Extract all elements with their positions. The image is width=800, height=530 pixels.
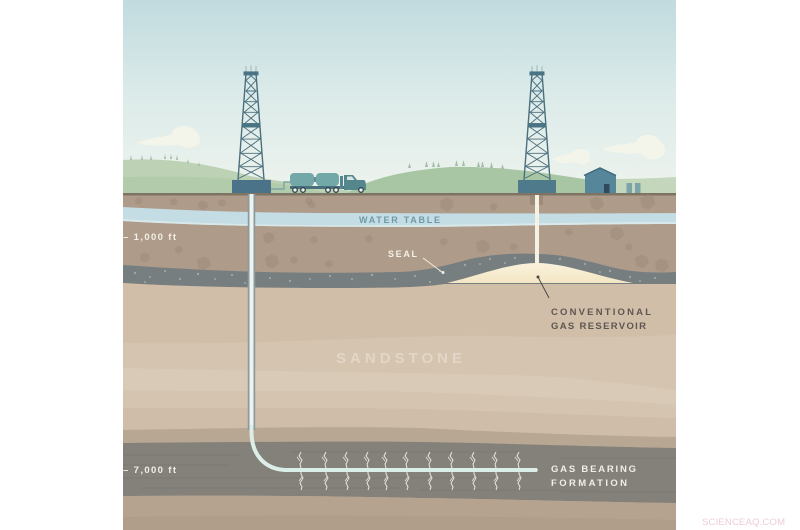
horizontal well	[252, 194, 537, 470]
ground line	[123, 193, 676, 196]
scene clipped to panel	[123, 65, 676, 530]
redraw well over fractures	[300, 468, 538, 472]
soil speckles	[135, 194, 669, 272]
upper soil layer	[123, 194, 676, 290]
deep rock layer	[146, 496, 668, 503]
seal label	[388, 249, 444, 274]
background panel	[123, 0, 676, 530]
gas bearing formation label: GAS BEARING	[551, 464, 636, 475]
depth label 1,000 ft: – 1,000 ft	[123, 232, 177, 243]
water table label: WATER TABLE	[359, 215, 440, 225]
conventional gas reservoir label: GAS RESERVOIR	[551, 321, 646, 332]
cloud: left	[136, 126, 200, 148]
derrick base	[232, 180, 271, 194]
hills	[123, 159, 676, 194]
sandstone strata	[123, 283, 676, 448]
clouds	[136, 126, 665, 164]
depth label 7,000 ft: – 7,000 ft	[123, 465, 177, 476]
gas reservoir	[447, 263, 633, 283]
derrick base right	[518, 180, 556, 194]
oil derrick left	[232, 65, 271, 194]
reservoir arrow	[536, 276, 549, 298]
seal label: SEAL	[388, 249, 418, 259]
conventional gas reservoir label: CONVENTIONAL	[551, 307, 651, 318]
shed	[584, 168, 616, 194]
gas bearing formation label: FORMATION	[551, 478, 627, 489]
oil derrick right	[518, 65, 556, 194]
cloud: middle	[552, 149, 590, 164]
sandstone label: SANDSTONE	[336, 350, 462, 367]
trees on hills	[130, 154, 504, 169]
fractures	[297, 452, 521, 490]
gas bearing formation	[123, 442, 676, 503]
seal arrow	[423, 258, 442, 272]
truck	[271, 173, 366, 192]
cloud: right	[602, 135, 665, 159]
watermark: SCIENCEAQ.COM	[702, 517, 785, 528]
water table layer	[123, 207, 676, 227]
conventional well	[530, 195, 543, 263]
sky	[123, 0, 676, 194]
seal layer	[123, 254, 676, 288]
storage tanks	[626, 183, 640, 194]
